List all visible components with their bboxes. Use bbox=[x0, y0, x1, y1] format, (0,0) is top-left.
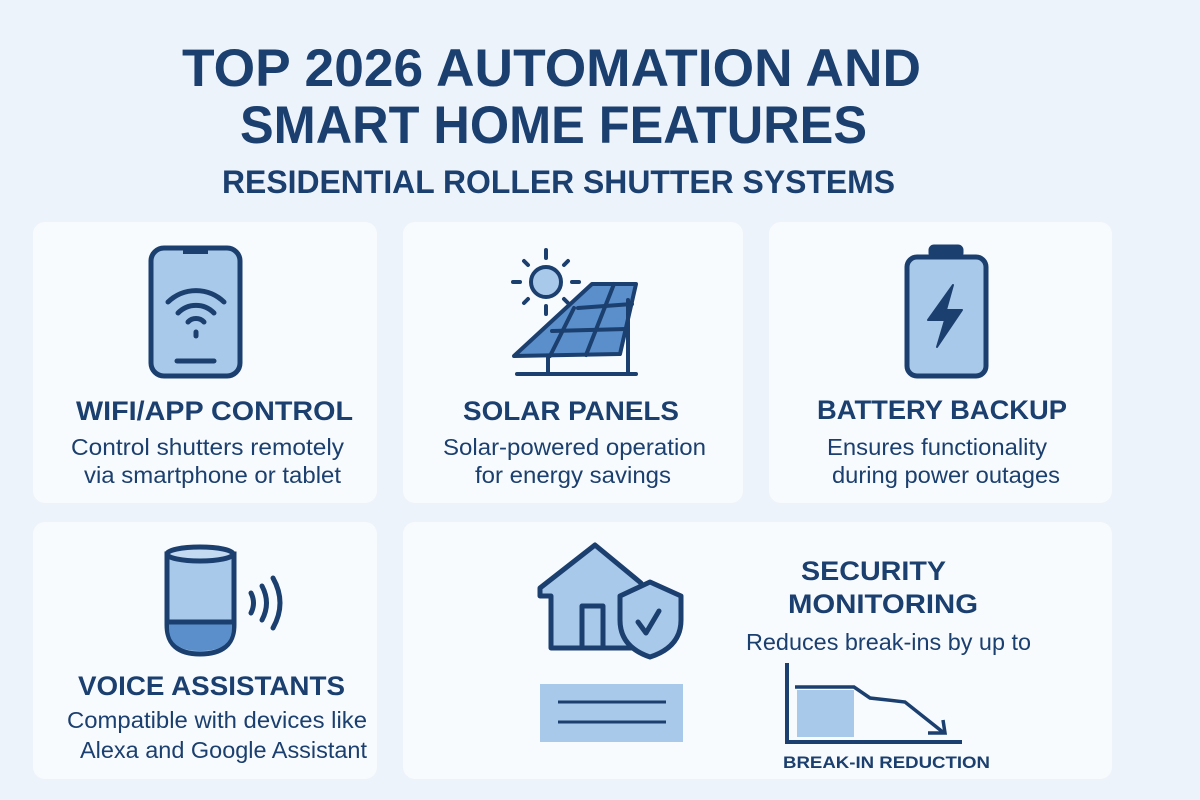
icon: house with shield bbox=[540, 545, 681, 657]
chart: break-in reduction bbox=[783, 663, 990, 772]
icon: sun and solar panel bbox=[513, 250, 636, 374]
title: TOP 2026 AUTOMATION AND bbox=[182, 39, 921, 98]
icon: smartphone with wifi bbox=[151, 248, 240, 376]
heading: SOLAR PANELS bbox=[463, 396, 679, 426]
heading: WIFI/APP CONTROL bbox=[76, 396, 353, 426]
heading bbox=[788, 556, 978, 619]
title: SMART HOME FEATURES bbox=[240, 96, 867, 155]
text: Solar-powered operation bbox=[443, 434, 706, 460]
panel: security monitoring bbox=[403, 522, 1112, 779]
icon: battery bbox=[907, 247, 986, 376]
heading: VOICE ASSISTANTS bbox=[78, 671, 345, 701]
text: Compatible with devices like bbox=[67, 707, 367, 733]
subtitle: RESIDENTIAL ROLLER SHUTTER SYSTEMS bbox=[222, 164, 895, 200]
heading: SECURITY bbox=[801, 556, 946, 586]
heading: BATTERY BACKUP bbox=[817, 395, 1067, 425]
icon: control panel bbox=[540, 684, 683, 742]
text: Control shutters remotely bbox=[71, 434, 345, 460]
panel: wifi/app control: via smartphone or tablet bbox=[84, 462, 342, 488]
icon: smart speaker with sound waves bbox=[167, 547, 280, 654]
title bbox=[182, 39, 921, 155]
text: Reduces break-ins by up to bbox=[746, 629, 1031, 655]
chart: break-in reduction: BREAK-IN REDUCTION bbox=[783, 753, 990, 772]
panel: solar panels bbox=[403, 222, 743, 503]
panel: battery backup: during power outages bbox=[832, 462, 1060, 488]
panel: voice assistants: Alexa and Google Assistant bbox=[80, 737, 368, 763]
panel: solar panels: for energy savings bbox=[475, 462, 671, 488]
panel: voice assistants bbox=[33, 522, 377, 779]
panel: battery backup bbox=[769, 222, 1112, 503]
heading: MONITORING bbox=[788, 589, 978, 619]
text: Ensures functionality bbox=[827, 434, 1048, 460]
panel: wifi/app control bbox=[33, 222, 377, 503]
